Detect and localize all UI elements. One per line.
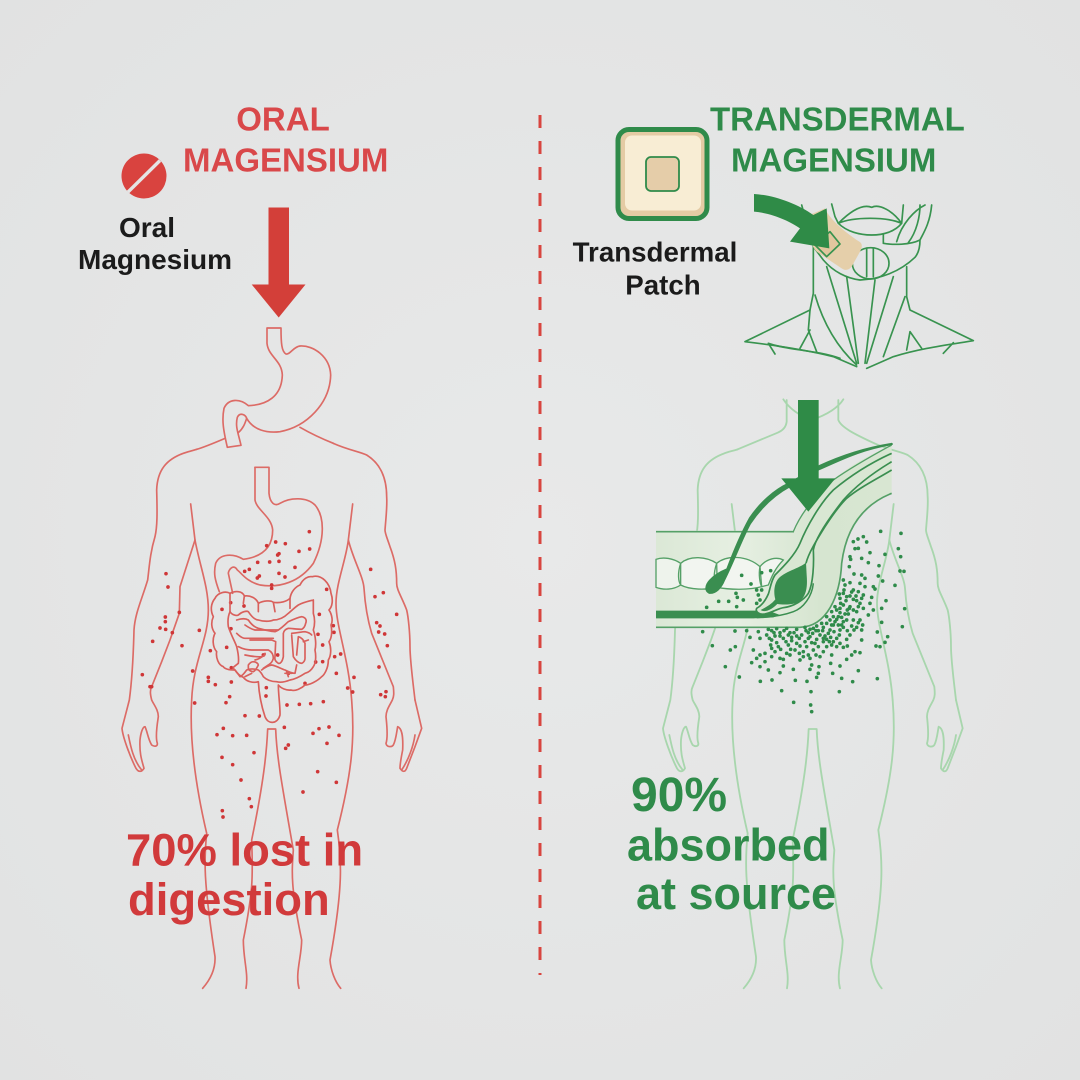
arrow: green down arrow — [781, 400, 835, 512]
divider: dashed centre line — [538, 115, 542, 975]
stat: 70% lost in digestion — [126, 824, 363, 925]
illustration: skin cross-section — [656, 445, 892, 627]
panel: oral magnesium — [78, 100, 422, 988]
stat: 70% lost in digestion: digestion — [128, 874, 330, 925]
dots: absorbed magnesium particles — [703, 531, 905, 712]
heading: oral magnesium: ORAL — [236, 100, 330, 138]
stat: 70% lost in digestion: 70% lost in — [126, 824, 363, 876]
stat: 90% absorbed at source: at source — [636, 868, 836, 919]
arrow: red down arrow — [252, 208, 306, 318]
panel: transdermal magnesium — [573, 100, 973, 988]
label: transdermal patch — [573, 236, 737, 300]
stat: 90% absorbed at source: absorbed — [627, 820, 830, 870]
illustration: hair follicles — [707, 444, 892, 618]
icon: patch on neck — [809, 208, 862, 270]
illustration: large and small intestine — [211, 576, 332, 722]
label: transdermal patch: Transdermal — [573, 236, 737, 268]
illustration: stomach inside torso — [215, 467, 322, 593]
label: transdermal patch: Patch — [625, 270, 701, 300]
stat: 90% absorbed at source — [627, 769, 836, 919]
heading: transdermal magnesium: TRANSDERMAL — [710, 100, 965, 138]
label: oral magnesium: Magnesium — [78, 244, 232, 275]
heading: transdermal magnesium — [710, 100, 965, 178]
heading: oral magnesium: MAGENSIUM — [183, 142, 388, 178]
dots: lost magnesium particles — [142, 532, 397, 817]
heading: oral magnesium — [183, 100, 388, 178]
illustration: upper stomach — [197, 328, 333, 449]
body outline: green — [663, 399, 963, 988]
label: oral magnesium — [78, 212, 232, 275]
heading: transdermal magnesium: MAGENSIUM — [731, 142, 936, 178]
illustration: neck and shoulders — [745, 204, 973, 368]
arrow: green curved arrow — [754, 194, 829, 248]
label: oral magnesium: Oral — [119, 212, 175, 243]
icon: red pill — [122, 154, 166, 198]
icon: transdermal patch — [618, 130, 707, 218]
stat: 90% absorbed at source: 90% — [631, 769, 727, 822]
body outline: red — [122, 328, 422, 988]
